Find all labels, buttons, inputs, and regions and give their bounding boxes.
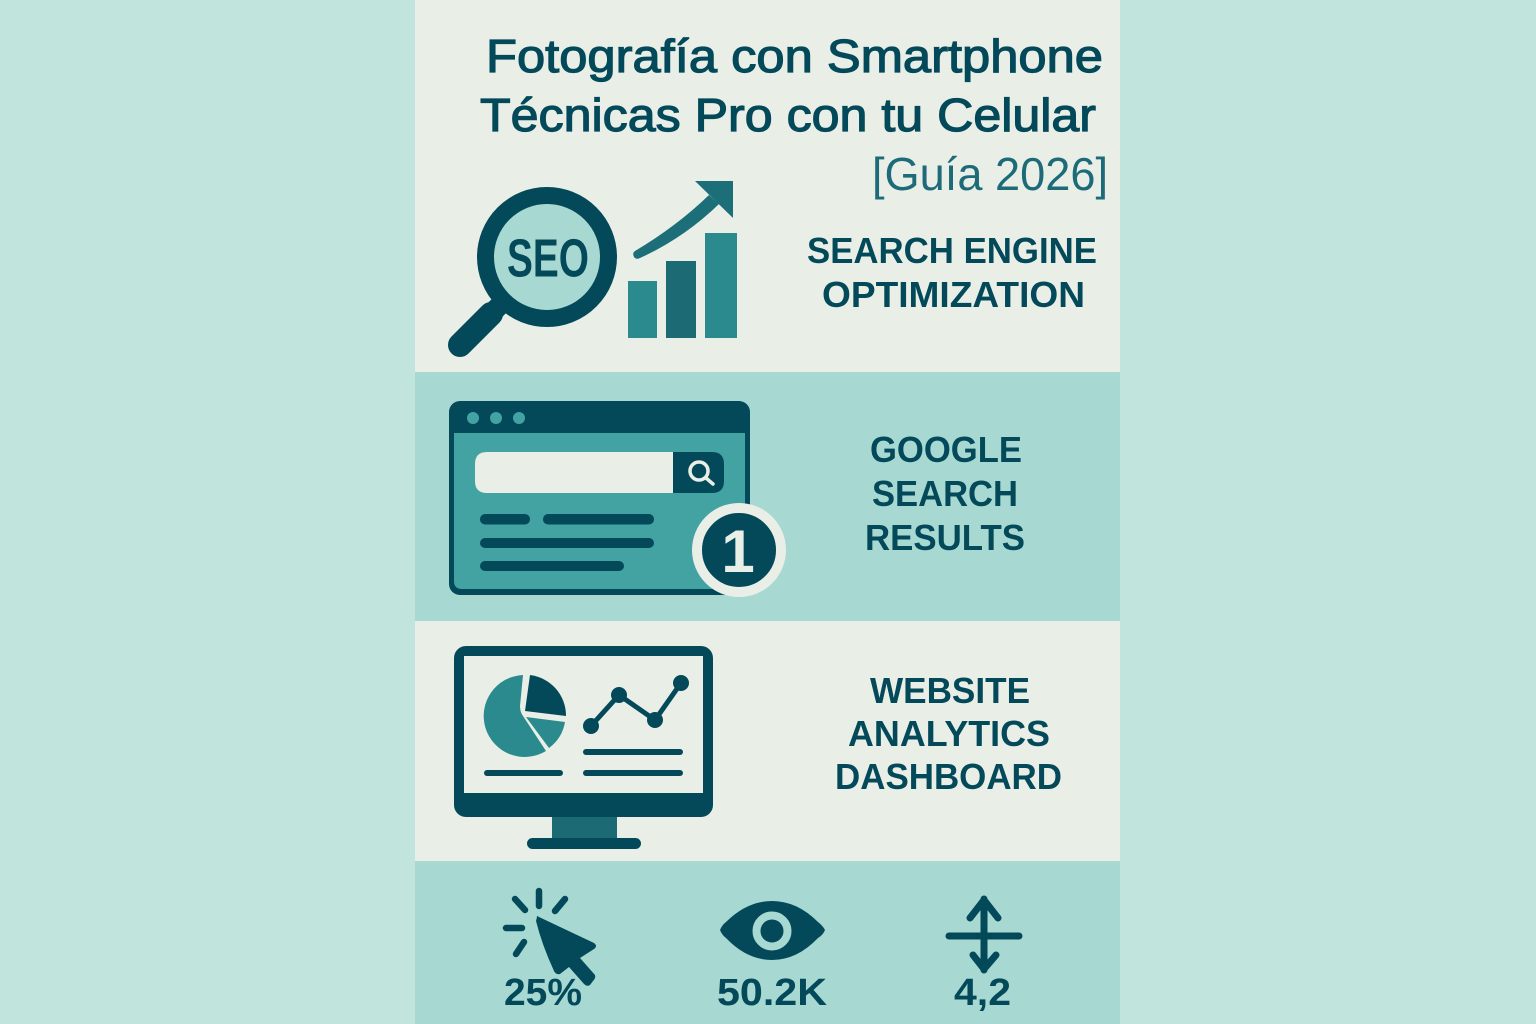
title: Fotografía con Smartphone (486, 30, 1103, 82)
icon: up down arrows (949, 899, 1019, 970)
label: google search results: RESULTS (865, 517, 1025, 558)
panel: metrics (415, 861, 1120, 1024)
line chart (583, 675, 689, 734)
icon: click cursor (506, 891, 596, 986)
metric: 4,2: 4,2 (954, 972, 1011, 1014)
icon: rank 1 badge: 1 (721, 518, 755, 585)
panel: SEO header (415, 0, 1120, 372)
icon: rank 1 badge (697, 508, 781, 592)
panel: website analytics (415, 621, 1120, 861)
icon: SEO magnifying glass (460, 196, 608, 345)
label: website analytics dashboard: DASHBOARD (835, 756, 1062, 797)
label: website analytics dashboard (835, 670, 1062, 797)
label: google search results: SEARCH (872, 473, 1018, 514)
title (480, 30, 1108, 200)
pie chart (484, 675, 566, 757)
metric: 50.2K: 50.2K (717, 972, 828, 1014)
metric: 25%: 25% (504, 972, 582, 1014)
title: Técnicas Pro con tu Celular (480, 89, 1096, 141)
icon: browser window (449, 401, 750, 595)
label: search engine optimization: SEARCH ENGINE (807, 230, 1097, 271)
label: website analytics dashboard: WEBSITE (870, 670, 1030, 711)
icon: SEO magnifying glass: SEO (507, 228, 589, 288)
title: [Guía 2026] (872, 148, 1108, 200)
icon: analytics monitor (454, 646, 713, 849)
icon: eye (720, 901, 825, 960)
label: website analytics dashboard: ANALYTICS (848, 713, 1050, 754)
label: search engine optimization (807, 230, 1097, 315)
label: google search results (865, 429, 1025, 558)
panel: Google search results (415, 372, 1120, 621)
label: search engine optimization: OPTIMIZATION (822, 274, 1085, 315)
label: google search results: GOOGLE (870, 429, 1022, 470)
icon: growth bar chart with arrow (628, 181, 737, 338)
